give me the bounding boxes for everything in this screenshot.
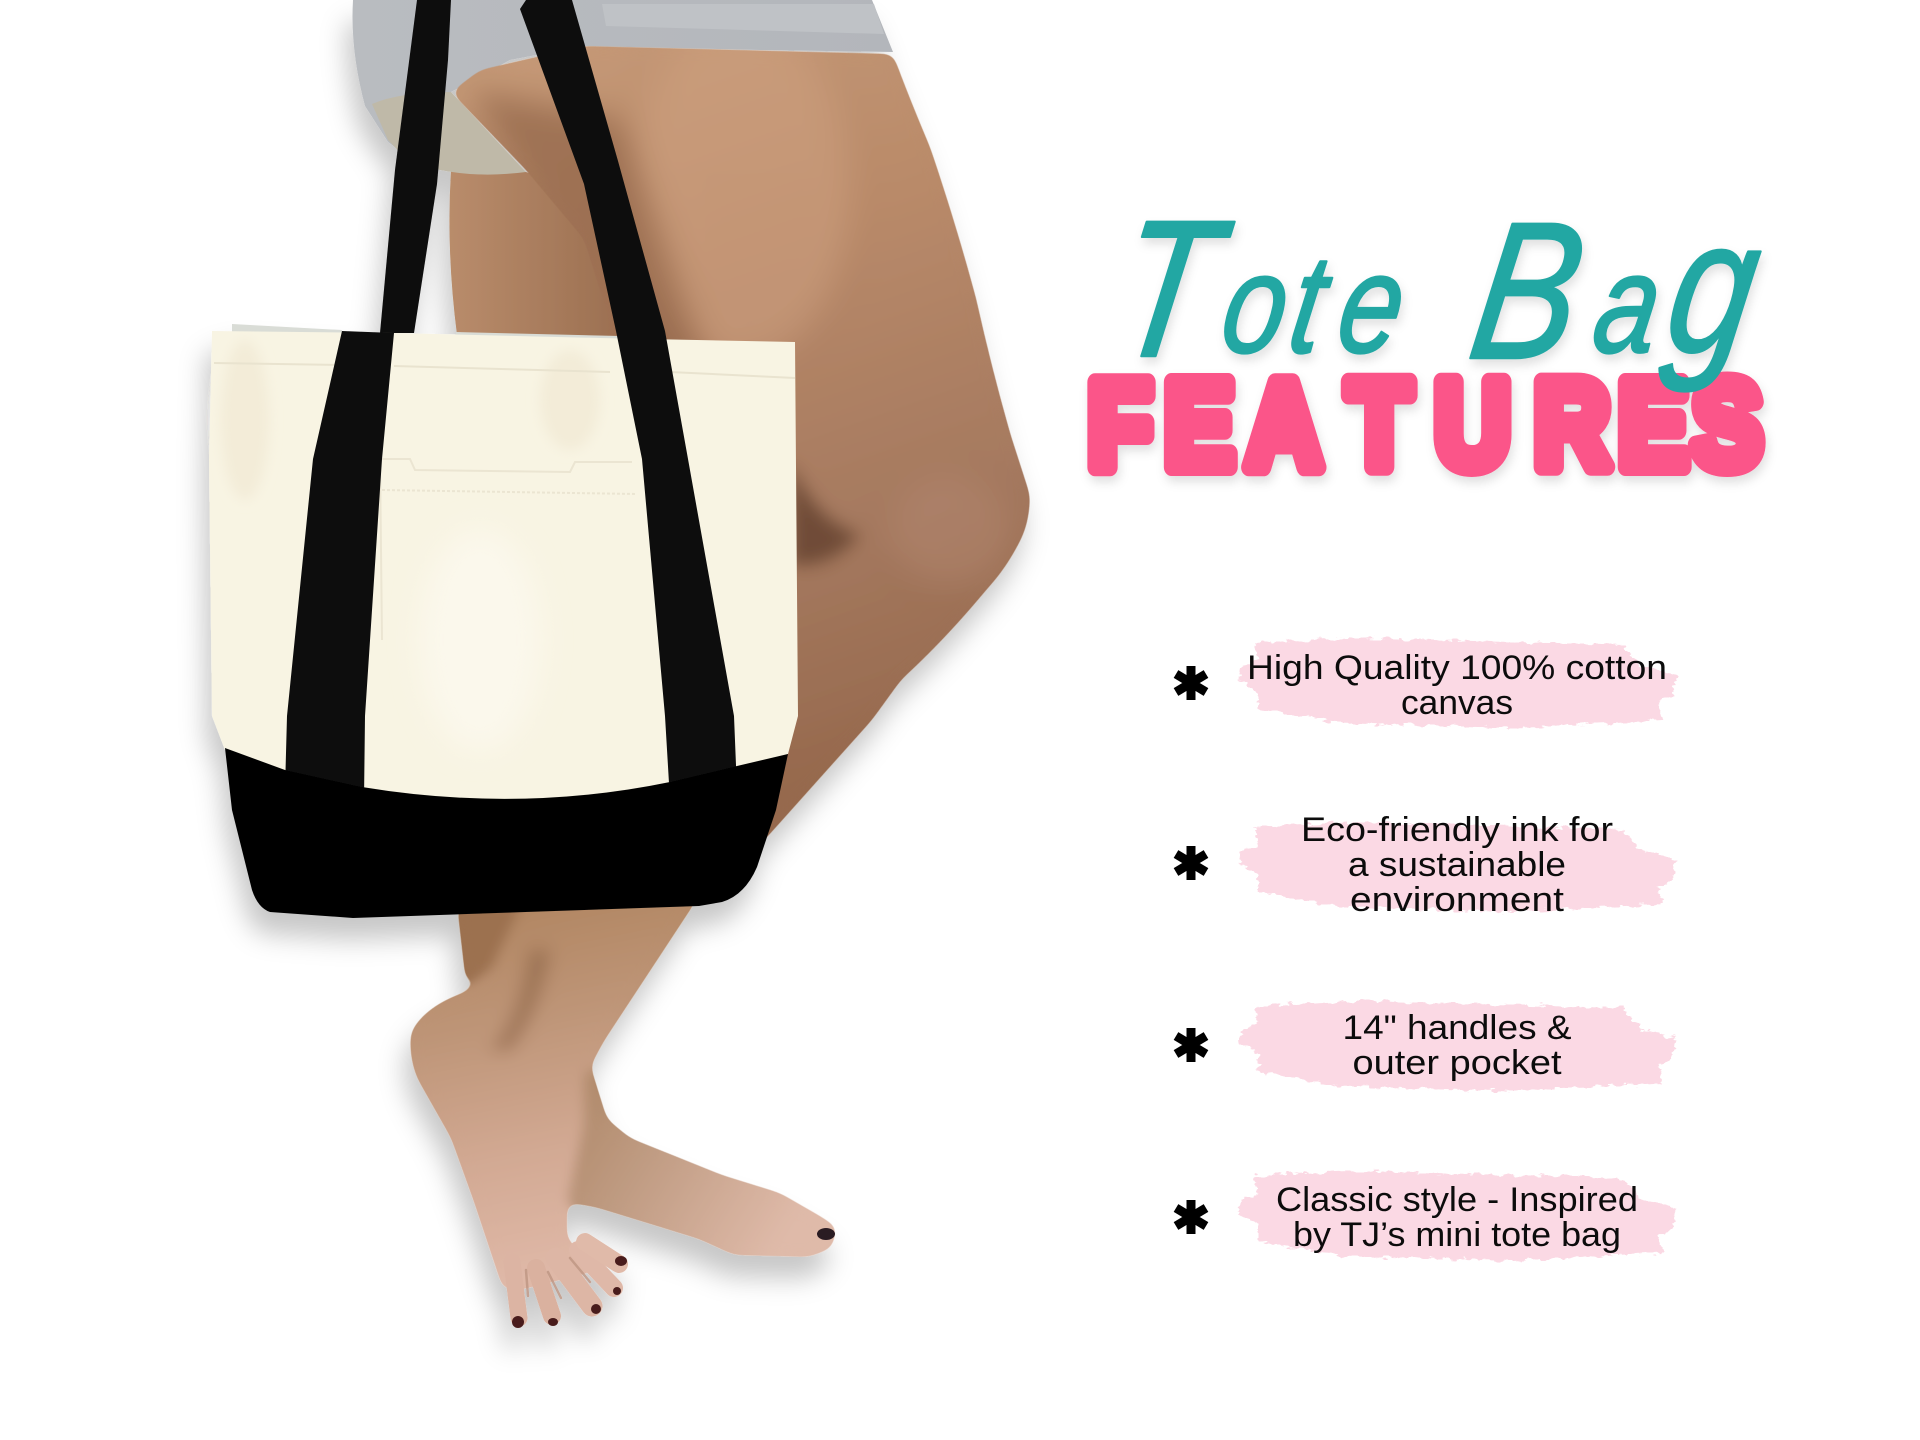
feature text: 14" handles &	[1342, 1009, 1572, 1047]
knee crease shadow	[790, 460, 860, 566]
tote bag	[209, 0, 798, 918]
top seam	[214, 363, 795, 378]
pocket	[380, 459, 636, 640]
feature row 2	[1176, 811, 1676, 919]
asterisk icon	[1176, 846, 1206, 880]
heading: FEATURES: FEATURES	[1088, 357, 1762, 494]
handle rear parts	[380, 0, 451, 333]
bag inside lining	[232, 324, 620, 344]
heading: Tote Bag: t	[1281, 226, 1341, 383]
feature row 3	[1176, 1001, 1676, 1091]
canvas body	[209, 331, 798, 805]
canvas tint patches	[420, 530, 540, 750]
black base	[225, 748, 788, 918]
feature row 1	[1176, 638, 1676, 728]
ankle tendon shadow	[490, 950, 550, 1050]
feature text: canvas	[1401, 684, 1513, 722]
front thigh and knee	[451, 20, 1030, 860]
feature text: High Quality 100% cotton	[1247, 649, 1667, 687]
back foot pointing right	[565, 1000, 837, 1257]
toenails	[512, 1228, 835, 1328]
photo: model legs holding tote bag	[209, 0, 1030, 1328]
heading: Tote Bag: e	[1329, 226, 1416, 383]
knee highlight	[908, 496, 994, 571]
heading: Tote Bag: o	[1213, 226, 1300, 383]
shorts waist band	[602, 4, 884, 34]
feature text: a sustainable	[1348, 846, 1566, 884]
feature text: Classic style - Inspired	[1276, 1181, 1638, 1219]
heading: Tote Bag: a	[1585, 226, 1672, 383]
heading: Tote Bag: g	[1655, 180, 1773, 393]
right handle	[520, 0, 737, 800]
feature row 4	[1176, 1171, 1676, 1261]
left handle front	[285, 331, 394, 800]
asterisk icon	[1176, 1028, 1206, 1062]
feature text: Eco-friendly ink for	[1301, 811, 1613, 849]
legs smoothing group	[410, 20, 1030, 1290]
thigh highlight	[650, 50, 840, 342]
back leg upper	[449, 170, 720, 640]
brush highlight	[1238, 638, 1676, 728]
grey shorts	[352, 0, 893, 170]
asterisk icon	[1176, 666, 1206, 700]
heading: Tote Bag: T	[1102, 180, 1242, 398]
toes of front foot	[512, 1242, 619, 1318]
inner thigh shadow	[468, 85, 706, 340]
brush highlight	[1238, 1001, 1676, 1091]
feature text: outer pocket	[1352, 1044, 1562, 1082]
asterisk icon	[1176, 1200, 1206, 1234]
front foot and ankle pointing down	[410, 895, 700, 1290]
back leg lower	[457, 905, 540, 984]
title	[1088, 180, 1773, 494]
brush highlight	[1238, 1171, 1676, 1261]
shorts inner lining	[372, 92, 526, 175]
brush highlight	[1238, 822, 1676, 912]
heading: Tote Bag: B	[1459, 182, 1597, 400]
feature text: environment	[1350, 881, 1565, 919]
feature text: by TJ’s mini tote bag	[1293, 1216, 1621, 1254]
